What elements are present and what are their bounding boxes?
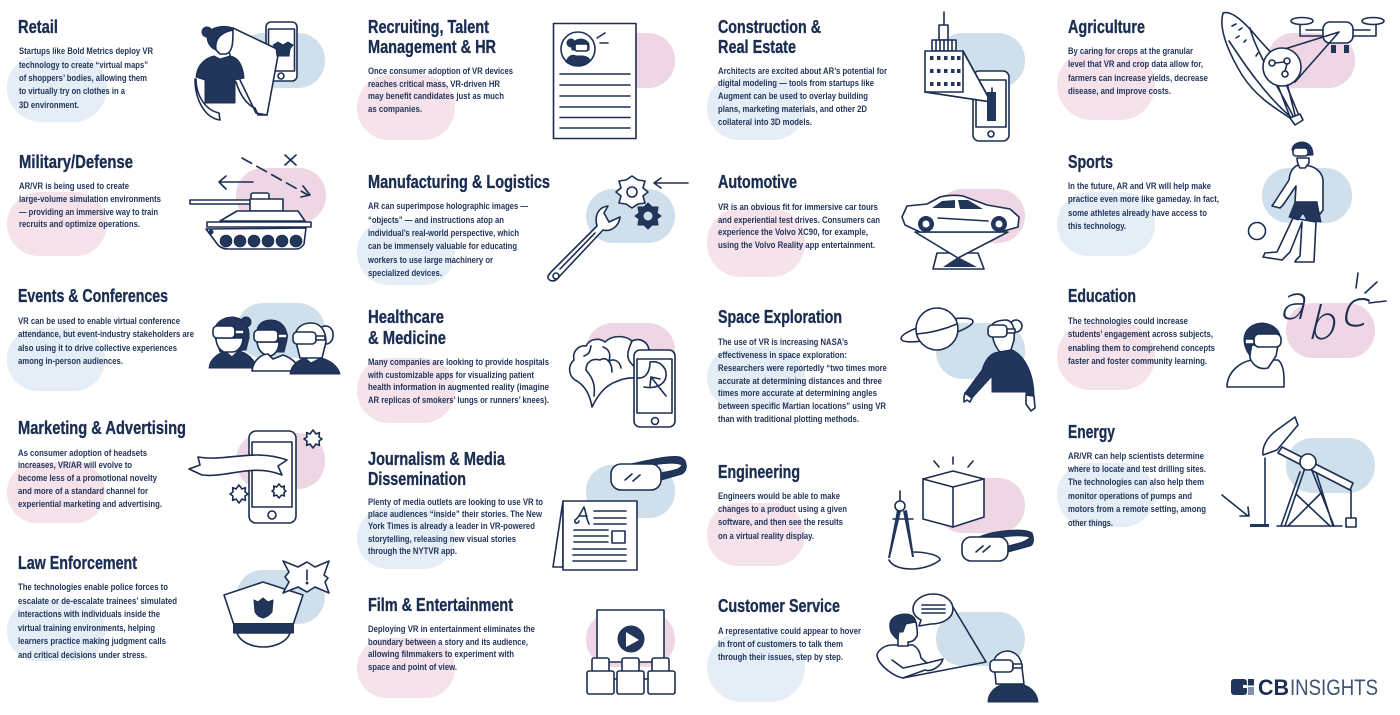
text: Retail body: technology to create “virtual maps” [19, 60, 148, 70]
text: Engineering body: software, and then see the results [718, 517, 843, 527]
heading: Manufacturing & Logistics: Manufacturing & Logistics [368, 171, 550, 192]
text: Education body [1068, 316, 1215, 366]
text: Journalism body [368, 497, 543, 556]
text: Sports body: some athletes already have access to [1068, 208, 1207, 218]
icon: crop leaf, drone scan and magnifier [1222, 13, 1384, 125]
text: Retail body: to virtually try on clothes in a [19, 86, 126, 96]
text: Construction body: digital modeling — tools from startups like [718, 78, 874, 88]
heading: Journalism [368, 448, 506, 489]
text: Space body [718, 337, 887, 424]
text: Film body: allowing filmmakers to experiment with [368, 649, 514, 659]
heading: Recruiting: Recruiting, Talent [368, 16, 489, 37]
text: Space body: than with traditional plotting methods. [718, 414, 859, 424]
heading: Space Exploration: Space Exploration [718, 306, 842, 327]
heading: Journalism: Journalism & Media [368, 448, 506, 469]
text: Military body: large-volume simulation environments [19, 194, 161, 204]
text: Space body: times more accurate at determining angles [718, 388, 877, 398]
text: Sports body [1068, 181, 1219, 231]
text: Journalism body: Plenty of media outlets are looking to use VR to [368, 497, 543, 507]
text: Marketing body: become less of a promotional novelty [18, 473, 158, 483]
text: Healthcare body [367, 357, 549, 405]
text: Retail body: 3D environment. [19, 100, 79, 110]
heading: Engineering: Engineering [718, 461, 800, 482]
heading: Education: Education [1068, 285, 1136, 306]
text: Law Enforcement body: virtual training environments, helping [18, 623, 155, 633]
panel: Events & Conferences [7, 285, 340, 391]
panel: Space Exploration [707, 306, 1035, 424]
text: Healthcare body: Many companies are looking to provide hospitals [368, 357, 549, 367]
panel: Marketing & Advertising [7, 417, 325, 523]
text: Retail body [19, 46, 153, 110]
text: Energy body: other things. [1068, 518, 1113, 528]
text: Manufacturing body: specialized devices. [368, 268, 442, 278]
text: Education body: enabling them to comprehend concepts [1068, 343, 1215, 353]
panel: Recruiting, Talent Management & HR [357, 16, 675, 140]
text: Recruiting body [368, 66, 513, 114]
icon: athlete with VR headset and ball [1248, 142, 1323, 262]
text: Manufacturing body: AR can superimpose holographic images — [368, 201, 529, 211]
heading: Film & Entertainment: Film & Entertainment [368, 594, 513, 615]
text: Construction body: plans, marketing materials, and other 2D [718, 104, 867, 114]
text: Sports body: In the future, AR and VR will help make [1068, 181, 1211, 191]
text: Agriculture body: farmers can increase yields, decrease [1068, 73, 1208, 83]
text: Manufacturing body [367, 201, 529, 278]
text: Law Enforcement body: learners practice making judgment calls [18, 636, 166, 646]
text: Military body: recruits and optimize operations. [19, 219, 140, 229]
text: Construction body: collateral into 3D models. [718, 117, 812, 127]
text: Law Enforcement body: escalate or de-escalate trainees’ simulated [18, 596, 177, 606]
text: Law Enforcement body: The technologies enable police forces to [18, 582, 168, 592]
heading: Sports: Sports [1068, 151, 1113, 172]
text: Customer Service body [718, 626, 861, 662]
text: Journalism body: through the NYTVR app. [368, 546, 457, 556]
panel: Manufacturing & Logistics [357, 171, 688, 285]
heading: Law Enforcement: Law Enforcement [18, 552, 137, 573]
text: Manufacturing body: individual’s real-world perspective, which [368, 228, 519, 238]
text: Automotive body: using the Volvo Reality app entertainment. [718, 240, 875, 250]
icon: phone with banner and stars [189, 430, 322, 523]
icon: car projected from phone [902, 195, 1019, 269]
text: Space body: effectiveness in space exploration: [718, 350, 847, 360]
panel: Automotive [707, 171, 1025, 277]
heading: Military/Defense: Military/Defense [19, 151, 133, 172]
text: Journalism body: place audiences “inside” their stories. The New [368, 509, 543, 519]
text: Recruiting body: may benefit candidates just as much [368, 91, 504, 101]
icon: VR goggles and newspaper [553, 457, 686, 570]
panel: Education [1057, 273, 1386, 390]
text: Law Enforcement body: interactions with individuals inside the [18, 609, 160, 619]
text: Automotive body: VR is an obvious fit for immersive car tours [718, 202, 878, 212]
text: Space body: Researchers were reportedly “two times more [718, 363, 887, 373]
heading: Retail: Retail [18, 16, 58, 37]
text: Healthcare body: with customizable apps for visualizing patient [367, 370, 534, 380]
heading: Construction: Real Estate [718, 36, 796, 57]
text: Agriculture body: By caring for crops at the granular [1068, 46, 1193, 56]
text: Energy body: AR/VR can help scientists determine [1068, 451, 1204, 461]
text: Military body: — providing an immersive way to train [19, 207, 158, 217]
logo: CB Insights: CB [1258, 675, 1289, 700]
text: Manufacturing body: can be immensely valuable for educating [368, 241, 517, 251]
logo: CB Insights [1231, 675, 1378, 700]
text: Marketing body [18, 448, 162, 509]
text: Manufacturing body: “objects” — and instructions atop an [368, 215, 504, 225]
text: Marketing body: experiential marketing and advertising. [18, 499, 162, 509]
text: Marketing body: and more of a standard channel for [18, 486, 148, 496]
panel: Film & Entertainment [357, 594, 675, 698]
panel: Healthcare & Medicine [357, 306, 675, 427]
text: Law Enforcement body [18, 582, 177, 660]
text: Healthcare body: AR replicas of smokers’ lungs or runners’ knees). [368, 395, 549, 405]
text: Space body: between specific Martian locations” using VR [718, 401, 886, 411]
panel: Agriculture [1057, 13, 1384, 125]
text: Events body [18, 316, 194, 366]
text: Education body: students’ engagement across subjects, [1068, 329, 1213, 339]
heading: Construction: Construction & [718, 16, 821, 37]
text: Sports body: this technology. [1068, 221, 1126, 231]
text: Automotive body [718, 202, 880, 250]
heading: Recruiting [368, 16, 496, 57]
panel: Customer Service [707, 594, 1038, 702]
heading: Automotive: Automotive [718, 171, 797, 192]
text: Customer Service body: A representative could appear to hover [718, 626, 861, 636]
text: Film body: Deploying VR in entertainment eliminates the [368, 624, 535, 634]
text: Engineering body: changes to a product using a given [718, 504, 847, 514]
panel: Construction & Real Estate [707, 12, 1025, 141]
text: Engineering body [718, 491, 847, 541]
heading: Healthcare & Medicine [368, 306, 446, 348]
text: Energy body: monitor operations of pumps and [1068, 491, 1192, 501]
panel: Retail [7, 16, 325, 122]
icon: cube, compass and VR goggles [888, 457, 1033, 569]
icon: student in VR headset and floating letters [1227, 273, 1386, 387]
text: Automotive body: experience the Volvo XC90, for example, [718, 227, 868, 237]
text: Customer Service body: in front of customers to talk them [718, 639, 843, 649]
text: Manufacturing body: workers to use large machinery or [367, 255, 493, 265]
icon: brain and phone [570, 337, 675, 427]
text: Construction body: Augment can be used to overlay building [718, 91, 868, 101]
text: Marketing body: As consumer adoption of headsets [18, 448, 147, 458]
panel: Law Enforcement [7, 552, 329, 661]
text: Agriculture body: disease, and improve costs. [1068, 86, 1171, 96]
text: Retail body: of shoppers’ bodies, allowing them [19, 73, 147, 83]
text: Military body: AR/VR is being used to create [19, 181, 129, 191]
text: Space body: accurate at determining distances and three [718, 376, 882, 386]
heading: Healthcare & Medicine: & Medicine [368, 327, 446, 348]
heading: Energy: Energy [1068, 421, 1116, 442]
icon: tank with arrows [190, 155, 311, 249]
icon: woman trying on a shirt via phone [195, 22, 297, 120]
icon: skyscraper projected from phone [925, 12, 1009, 141]
text: Film body [368, 624, 535, 672]
text: Customer Service body: through their issues, step by step. [718, 652, 843, 662]
text: Energy body [1067, 451, 1206, 528]
text: Construction body: Architects are excited about AR’s potential for [718, 66, 887, 76]
text: Law Enforcement body: and critical decisions under stress. [18, 650, 147, 660]
icon: resume with VR portrait [554, 24, 636, 138]
text: Journalism body: York Times is already a leader in VR-powered [368, 521, 535, 531]
text: Engineering body: Engineers would be able to make [718, 491, 840, 501]
text: Energy body: The technologies can also help them [1068, 477, 1204, 487]
text: Events body: also using it to drive collective experiences [18, 343, 177, 353]
text: Energy body: where to locate and test drilling sites. [1067, 464, 1206, 474]
heading: Journalism: Dissemination [368, 468, 466, 489]
text: Recruiting body: Once consumer adoption of VR devices [368, 66, 513, 76]
text: Agriculture body [1068, 46, 1208, 96]
panel: Energy [1057, 417, 1375, 528]
text: Construction body [718, 66, 887, 127]
text: Retail body: Startups like Bold Metrics deploy VR [19, 46, 153, 56]
heading: Events & Conferences: Events & Conferences [18, 285, 168, 306]
text: Engineering body: on a virtual reality display. [718, 531, 814, 541]
panel: Engineering [707, 457, 1033, 569]
text: Education body: faster and foster community learning. [1068, 356, 1207, 366]
heading: Agriculture: Agriculture [1068, 16, 1145, 37]
icon: student in VR headset and floating letters: c [1339, 280, 1370, 338]
heading: Customer Service: Customer Service [718, 595, 840, 616]
text: Agriculture body: level that VR and crop data allow for, [1068, 59, 1203, 69]
icon: student in VR headset and floating letters: a [1278, 276, 1307, 330]
heading: Construction [718, 16, 821, 57]
text: Events body: attendance, but event-industry stakeholders are [18, 329, 194, 339]
text: Film body: boundary between a story and its audience, [368, 637, 528, 647]
text: Film body: space and point of view. [368, 662, 457, 672]
text: Events body: among in-person audiences. [18, 356, 123, 366]
icon: planet and astronaut in VR headset [899, 308, 1035, 411]
text: Events body: VR can be used to enable virtual conference [18, 316, 180, 326]
panel: Sports [1057, 142, 1352, 262]
text: Education body: The technologies could increase [1068, 316, 1188, 326]
heading: Recruiting: Management & HR [368, 36, 496, 57]
text: Sports body: practice even more like gameday. In fact, [1068, 194, 1219, 204]
icon: wrench, gears and arrow [548, 176, 688, 281]
panel: Journalism & Media Dissemination [357, 448, 686, 570]
text: Automotive body: and experiential test drives. Consumers can [718, 215, 880, 225]
logo: CB Insights: INSIGHTS [1290, 675, 1378, 700]
heading: Healthcare & Medicine: Healthcare [368, 306, 444, 327]
heading: Marketing & Advertising: Marketing & Advertising [18, 417, 186, 438]
text: Healthcare body: health information in augmented reality (imagine [368, 382, 549, 392]
text: Recruiting body: reaches critical mass, VR-driven HR [368, 79, 500, 89]
text: Energy body: motors from a remote setting, among [1068, 504, 1206, 514]
panel: Military/Defense [7, 151, 326, 256]
icon: representative with speech bubble and VR user [877, 594, 1038, 702]
text: Space body: The use of VR is increasing NASA’s [718, 337, 848, 347]
text: Recruiting body: as companies. [368, 104, 422, 114]
icon: student in VR headset and floating letters: b [1306, 296, 1337, 350]
icon: oil pumpjack with arrow [1222, 417, 1356, 527]
text: Marketing body: increases, VR/AR will evolve to [18, 460, 132, 470]
text: Military body [19, 181, 161, 229]
text: Journalism body: storytelling, releasing new visual stories [368, 534, 516, 544]
icon: police cap with alert burst [224, 561, 329, 647]
icon: three people wearing VR headsets [209, 317, 340, 374]
icon: cinema screen with play button and seats [587, 610, 675, 694]
